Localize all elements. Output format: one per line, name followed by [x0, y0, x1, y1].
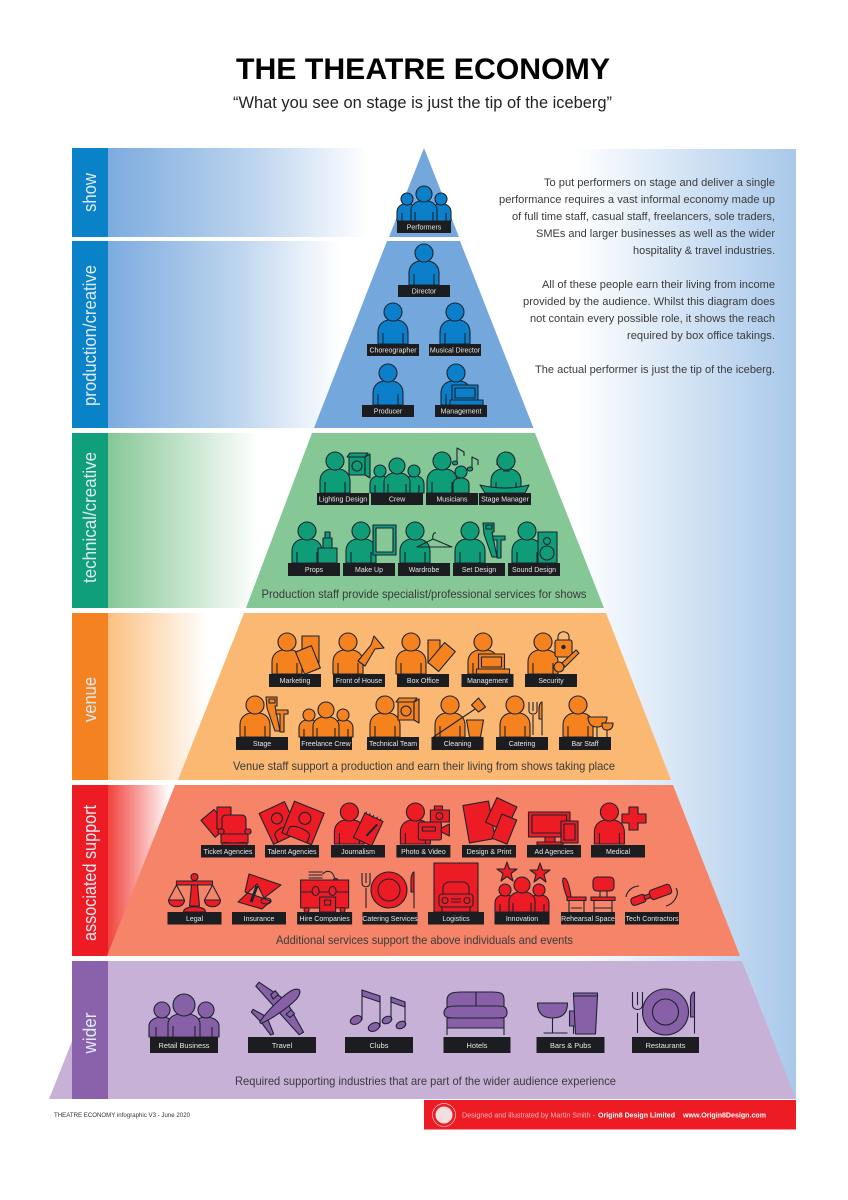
- role: Management (venue): Management: [467, 678, 508, 685]
- role: Tech Contractors: Tech Contractors: [626, 916, 679, 923]
- intro text block: hospitality & travel industries.: [633, 245, 775, 257]
- role: Clubs: Clubs: [370, 1041, 389, 1050]
- role: Set Design: Set Design: [462, 567, 496, 574]
- footer banner: [424, 1100, 796, 1130]
- banner text: Designed and illustrated by Martin Smith -: [462, 1110, 596, 1120]
- role: Medical: [591, 803, 646, 858]
- role: Innovation: [494, 862, 550, 924]
- role: Security: Security: [538, 678, 564, 685]
- subtitle: “What you see on stage is just the tip of the iceberg”: [233, 93, 612, 112]
- role: Director: [398, 244, 450, 297]
- role: Make Up: Make Up: [355, 567, 383, 574]
- footer credit: THEATRE ECONOMY infographic V3 - June 2020: [54, 1113, 191, 1119]
- role: Freelance Crew: [299, 702, 353, 750]
- role: Set Design: [453, 522, 505, 576]
- intro text block: SMEs and larger businesses as well as the wider: [536, 228, 775, 240]
- icon: logo: [432, 1104, 456, 1126]
- role: Ad Agencies: [527, 812, 581, 858]
- role: Ad Agencies: Ad Agencies: [535, 849, 574, 856]
- side tab: show: [72, 148, 108, 237]
- role: Cleaning: Cleaning: [444, 741, 471, 748]
- role: Ticket Agencies: Ticket Agencies: [204, 849, 253, 856]
- side tab: associated support: [72, 785, 108, 956]
- role: Technical Team: Technical Team: [369, 741, 417, 748]
- role: Make Up: [343, 522, 396, 576]
- role: Management: Management: [441, 409, 481, 416]
- role: Tech Contractors: [625, 883, 679, 924]
- side tab: production/creative: production/creative: [79, 265, 100, 406]
- caption: associated support: Additional services support the above individuals and events: [276, 933, 573, 947]
- role: Logistics: [428, 863, 484, 924]
- role: Travel: Travel: [272, 1041, 292, 1050]
- role: Freelance Crew: Freelance Crew: [301, 741, 352, 748]
- caption: venue: Venue staff support a production and earn their living from shows taking place: [233, 759, 615, 773]
- role: Box Office: [396, 633, 455, 687]
- panel: show: [72, 148, 459, 237]
- banner text: Origin8 Design Limited: [598, 1110, 675, 1120]
- side tab: technical/creative: technical/creative: [79, 452, 100, 583]
- role: Photo & Video: Photo & Video: [401, 849, 446, 856]
- side tab: associated support: associated support: [79, 805, 100, 941]
- role: Hotels: [444, 992, 510, 1053]
- role: Management: [435, 364, 487, 417]
- role: Bars & Pubs: Bars & Pubs: [550, 1041, 591, 1050]
- banner text: [462, 1110, 766, 1120]
- intro text block: The actual performer is just the tip of the iceberg.: [535, 364, 775, 376]
- title: THE THEATRE ECONOMY: [236, 53, 610, 86]
- intro text block: performance requires a vast informal economy made up: [499, 194, 775, 206]
- role: Choreographer: [367, 303, 419, 356]
- role: Musicians: Musicians: [436, 497, 468, 504]
- banner text: www.Origin8Design.com: [682, 1110, 766, 1120]
- role: Ticket Agencies: [201, 807, 255, 858]
- caption: wider: Required supporting industries that are part of the wider audience experience: [235, 1074, 616, 1088]
- role: Journalism: [331, 803, 385, 858]
- role: Insurance: Insurance: [244, 916, 274, 923]
- role: Design & Print: [462, 798, 517, 858]
- role: Props: [288, 522, 340, 576]
- role: Insurance: [232, 874, 286, 924]
- role: Stage: [236, 696, 288, 750]
- panel: technical/creative: [72, 433, 604, 608]
- role: Front of House: [333, 633, 385, 687]
- intro text block: [499, 177, 775, 376]
- role: Stage: Stage: [253, 741, 271, 748]
- role: Talent Agencies: [259, 801, 324, 858]
- intro text block: required by box office takings.: [627, 330, 775, 342]
- side tab: venue: [72, 613, 108, 780]
- side tab: wider: wider: [79, 1012, 100, 1054]
- intro text block: of full time staff, casual staff, freelancers, sole traders,: [512, 211, 775, 223]
- pyramid tier: production/creative: [314, 241, 534, 428]
- role: Musical Director: Musical Director: [430, 348, 481, 355]
- panel: production/creative: [72, 241, 534, 428]
- intro text block: provided by the audience. Whilst this diagram does: [523, 296, 775, 308]
- side tab: venue: venue: [79, 677, 100, 722]
- role: Producer: Producer: [374, 409, 403, 416]
- side tab: production/creative: [72, 241, 108, 428]
- role: Cleaning: [432, 696, 486, 750]
- role: Travel: [240, 965, 322, 1053]
- role: Catering: Catering: [509, 741, 535, 748]
- role: Stage Manager: [479, 452, 531, 505]
- role: Hire Companies: [297, 871, 352, 924]
- role: Clubs: [345, 990, 413, 1053]
- role: Catering Services: Catering Services: [362, 916, 418, 923]
- role: Crew: Crew: [389, 497, 406, 504]
- role: Restaurants: Restaurants: [646, 1041, 686, 1050]
- role: Producer: [362, 364, 414, 417]
- role: Stage Manager: Stage Manager: [481, 497, 530, 504]
- role: Performers: Performers: [407, 225, 442, 232]
- role: Wardrobe: [398, 522, 452, 576]
- panel: venue: [72, 613, 671, 780]
- pyramid tier: show: [389, 148, 459, 237]
- role: Bar Staff: Bar Staff: [571, 741, 599, 748]
- role: Sound Design: Sound Design: [512, 567, 556, 574]
- panel: wider: [49, 961, 796, 1099]
- side tab: technical/creative: [72, 433, 108, 608]
- role: Design & Print: Design & Print: [467, 849, 511, 856]
- role: Marketing: [269, 633, 321, 687]
- role: Catering Services: [362, 872, 418, 924]
- panel: associated support: [72, 785, 740, 956]
- intro text block: not contain every possible role, it shows the reach: [530, 313, 775, 325]
- role: Hotels: Hotels: [467, 1041, 488, 1050]
- role: Restaurants: [632, 989, 699, 1053]
- role: Medical: Medical: [606, 849, 631, 856]
- role: Technical Team: [367, 696, 419, 750]
- role: Performers: [397, 186, 451, 233]
- role: Front of House: Front of House: [336, 678, 382, 685]
- role: Sound Design: [508, 522, 560, 576]
- pyramid tier: venue: [178, 613, 671, 780]
- role: Management (venue): [462, 633, 514, 687]
- role: Legal: Legal: [186, 916, 204, 923]
- caption: technical: Production staff provide specialist/professional services for shows: [262, 587, 586, 601]
- role: Innovation: Innovation: [506, 916, 538, 923]
- role: Bar Staff: [559, 696, 613, 750]
- role: Crew: [370, 458, 424, 505]
- role: Retail Business: [149, 994, 219, 1053]
- side tab: wider: [72, 961, 108, 1099]
- role: Rehearsal Space: Rehearsal Space: [561, 916, 615, 923]
- role: Talent Agencies: Talent Agencies: [267, 849, 317, 856]
- role: Lighting Design: Lighting Design: [319, 497, 367, 504]
- role: Logistics: Logistics: [442, 916, 470, 923]
- role: Musical Director: [429, 303, 481, 356]
- pyramid tier: technical/creative: [246, 433, 604, 608]
- role: Hire Companies: Hire Companies: [300, 916, 350, 923]
- role: Retail Business: Retail Business: [159, 1041, 210, 1050]
- role: Catering: [496, 696, 548, 750]
- pyramid tier: associated support: [107, 785, 740, 956]
- role: Security: [525, 632, 579, 687]
- role: Box Office: Box Office: [407, 678, 439, 685]
- intro text block: All of these people earn their living from income: [542, 279, 775, 291]
- role: Musicians: [426, 448, 478, 505]
- role: Props: Props: [305, 567, 324, 574]
- pyramid tier: wider: [49, 961, 796, 1099]
- intro text block: To put performers on stage and deliver a single: [544, 177, 775, 189]
- side tab: show: show: [79, 172, 100, 212]
- role: Marketing: Marketing: [280, 678, 310, 685]
- role: Director: Director: [412, 289, 437, 296]
- role: Bars & Pubs: [536, 993, 604, 1053]
- role: Rehearsal Space: [561, 877, 615, 924]
- role: Wardrobe: Wardrobe: [409, 567, 439, 574]
- role: Journalism: Journalism: [341, 849, 375, 856]
- role: Lighting Design: [317, 452, 370, 505]
- role: Legal: [168, 874, 222, 924]
- role: Choreographer: Choreographer: [369, 348, 417, 355]
- role: Photo & Video: [396, 803, 450, 858]
- background panel: right blue gradient: [480, 149, 796, 1098]
